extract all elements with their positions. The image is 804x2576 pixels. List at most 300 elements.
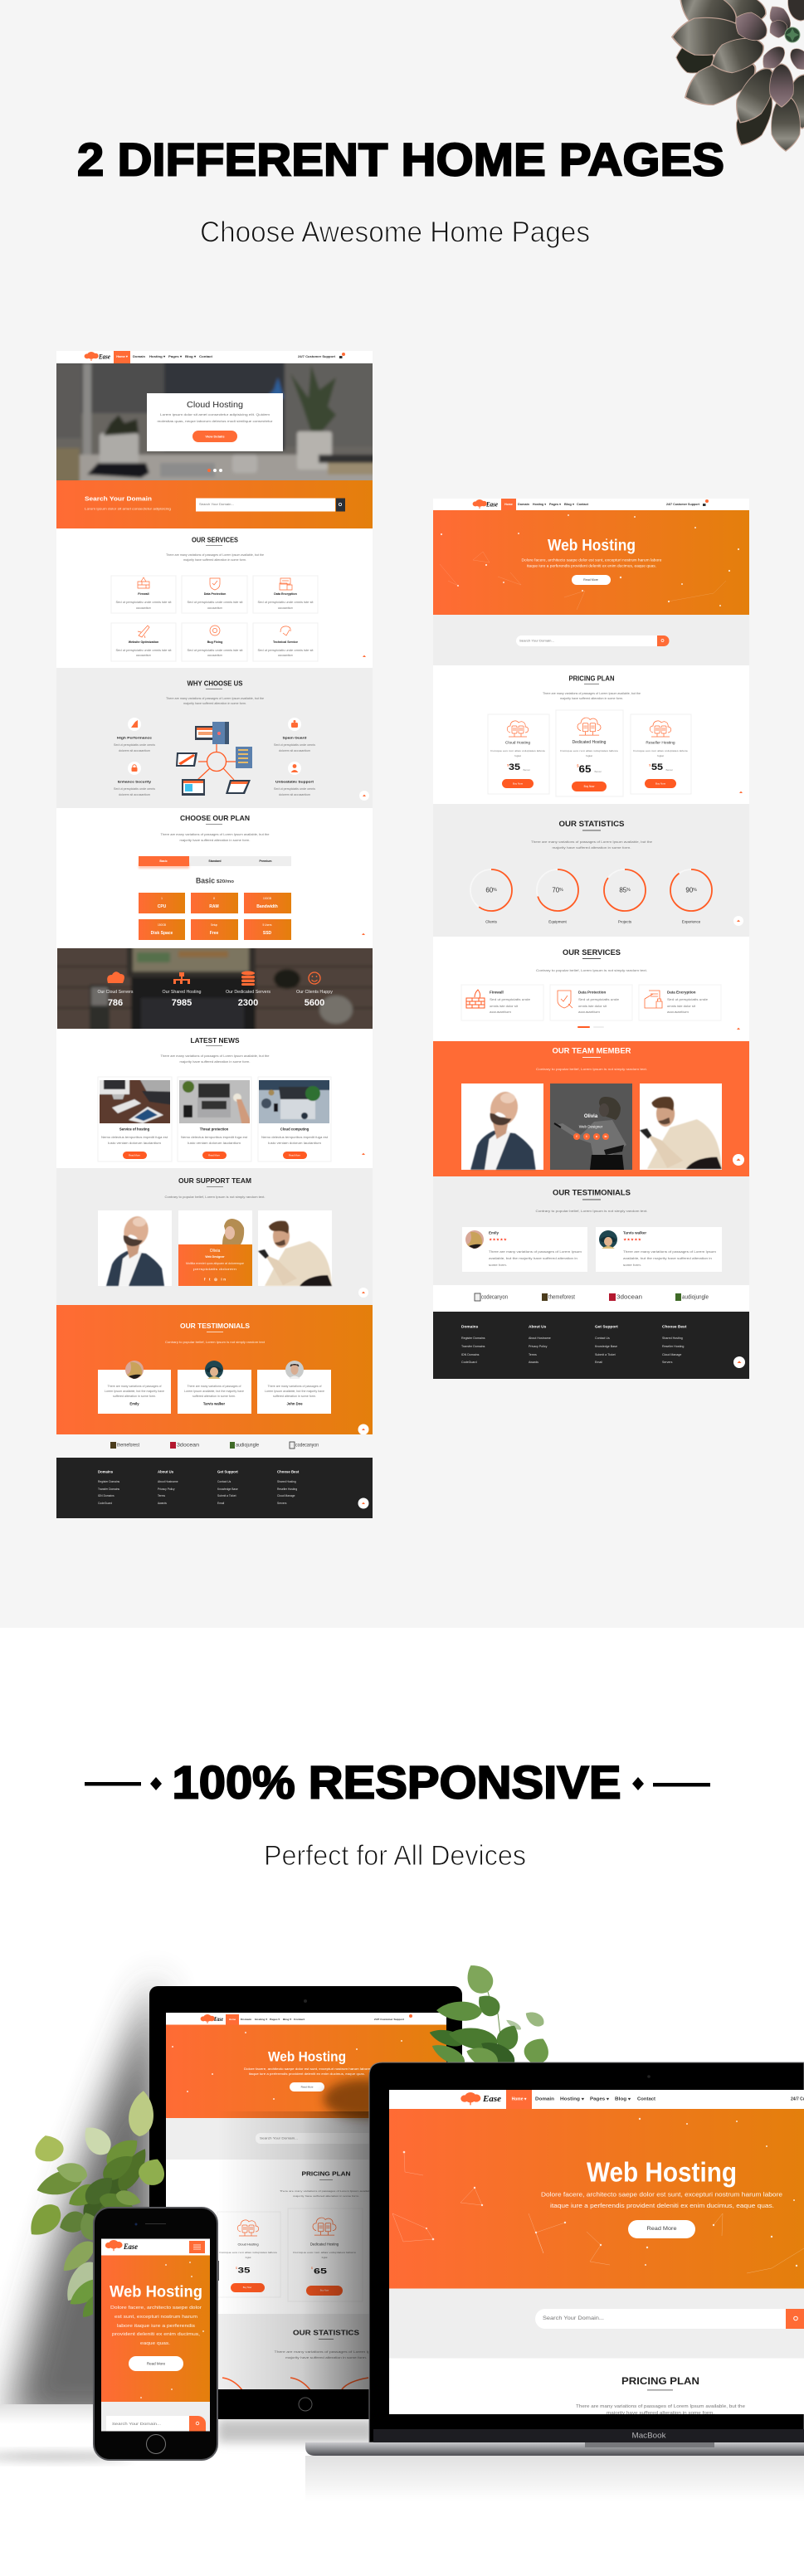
section: our testimonials: John Doe	[286, 1402, 303, 1405]
footer 2: Choose Best	[662, 1324, 687, 1329]
tablet screen: 35	[237, 2267, 251, 2275]
phone screen: Web Hosting	[110, 2283, 202, 2301]
macbook label: MacBook	[632, 2431, 666, 2441]
footer 1: Awards	[158, 1502, 167, 1505]
team card: man with phone	[258, 1210, 332, 1286]
section: our testimonials 2: Emily	[489, 1231, 499, 1234]
tablet screen: Buy Now	[243, 2286, 251, 2289]
tablet screen: There are many variations of passages of Lorem Ipsum available	[280, 2189, 373, 2193]
section: why choose us: dolorem sit accusantium	[119, 793, 150, 796]
section: our services: Technical Service	[273, 640, 298, 644]
device: laptop	[305, 2062, 804, 2456]
section: our testimonials 2: some form.	[623, 1264, 641, 1267]
laptop screen: Home ▾	[512, 2097, 527, 2102]
section: choose our plan: Premium	[260, 859, 271, 863]
team card: olivia: f t ◎ in	[204, 1278, 226, 1281]
section: latest news: Threat protection	[200, 1127, 229, 1132]
section: our services: Sed ut perspiciatis unde omnis iste sit	[188, 601, 243, 604]
section: latest news: Iusto veniam dolorum laudantium	[188, 1142, 241, 1145]
tablet screen: Domain	[241, 2018, 251, 2021]
section: our testimonials: Tarvis walker	[203, 1402, 225, 1405]
section: pricing plan: /Server	[594, 770, 602, 773]
section: our services 2: Firewall	[490, 991, 504, 994]
section: pricing plan: Reseller Hosting	[646, 740, 675, 745]
team 2 card: bald man	[461, 1083, 543, 1170]
section: pricing plan: Buy Now	[655, 782, 666, 785]
section: pricing plan	[488, 675, 746, 797]
section: why choose us: Sed ut perspiciatis unde omnis	[114, 743, 155, 747]
team card: olivia: Olivia	[210, 1249, 220, 1254]
section: our services 2: accusantium	[578, 1010, 600, 1014]
tablet screen: Ease	[213, 2016, 223, 2023]
search domain strip: Search Your Domain...	[519, 639, 554, 642]
section: our statistics: There are many variations of passages of Lorem Ipsum available, but the	[531, 840, 652, 844]
section: why choose us: majority have suffered alteration in some form.	[183, 702, 246, 705]
laptop screen: itaque iure a perferendis provident deleniti ex enim ducimus, eaque quas.	[550, 2202, 774, 2209]
progress ring: experience 90%	[670, 869, 712, 924]
section: latest news: Iusto veniam dolorum laudantium	[108, 1142, 161, 1145]
title: 2 different home pages: 2 DIFFERENT HOME PAGES	[77, 133, 724, 186]
section: choose our plan: majority have suffered alteration in some form.	[179, 839, 251, 842]
section: our testimonials 2: ★★★★★	[623, 1238, 642, 1241]
section: pricing plan: Cumque eos non alias voluptates labore	[490, 749, 545, 752]
search your domain band: Search Your Domain	[85, 494, 152, 503]
navigation bar 2	[473, 499, 709, 510]
section: pricing plan: $	[507, 763, 509, 767]
section: why choose us: dolorem sit accusantium	[279, 793, 310, 796]
navigation bar 2: Home	[504, 503, 513, 506]
footer 2: Reseller Hosting	[662, 1345, 684, 1348]
section: why choose us: Enhance Security	[118, 780, 152, 783]
stats band over desk photo	[57, 948, 373, 1029]
section: pricing plan: 55	[651, 762, 663, 772]
section: latest news: Iusto veniam dolorum laudantium	[268, 1142, 321, 1145]
tablet screen: There are many variations of passages of Lorem Ipsum	[274, 2350, 378, 2354]
section: our services 2: Data Encryption	[667, 991, 696, 994]
laptop screen: Ease	[482, 2094, 501, 2104]
hero: web hosting gradient with particles: Web Hosting	[548, 538, 636, 554]
progress ring: projects 85%: 85%	[619, 886, 631, 894]
hero: web hosting gradient with particles: itaque iure a perferendis provident deleniti ex enim ducimus, eaque quas.	[527, 564, 656, 567]
section: why choose us: dolorem sit accusantium	[119, 749, 150, 752]
footer 2: Cloud Manage	[662, 1353, 681, 1356]
section: latest news: Read More	[289, 1153, 300, 1157]
footer 1: IDN Domains	[98, 1494, 115, 1497]
section: our services 2: omnis iste dolor sit	[667, 1005, 695, 1008]
team 2 card: olivia dark overlay: t	[586, 1135, 587, 1138]
footer 2: Shared Hosting	[662, 1337, 683, 1340]
team 2 card: olivia dark overlay: Web Designer	[579, 1125, 603, 1128]
progress ring: experience 90%: Experience	[682, 919, 701, 924]
section: latest news: There are many variations of passages of Lorem Ipsum available, but the	[161, 1054, 270, 1058]
footer 1: Cloud Manage	[277, 1494, 295, 1497]
progress ring: projects 85%	[604, 869, 646, 924]
navigation bar 1: Home ▾	[116, 355, 129, 358]
footer 2: Privacy Policy	[529, 1345, 548, 1348]
partner logos row 2: themeforest	[548, 1294, 575, 1301]
stat: clients happy: Our Clients Happy	[296, 990, 334, 995]
partner logos row 2	[475, 1293, 709, 1301]
stat: shared hosting: Our Shared Hosting	[163, 990, 202, 995]
section: why choose us: Sed ut perspiciatis unde omnis	[274, 787, 315, 791]
footer 1: Contact Us	[217, 1480, 231, 1483]
hero card	[147, 393, 283, 451]
section: our services: accusantium	[207, 654, 222, 657]
footer 1: Email	[217, 1502, 225, 1505]
tablet screen: Cumque eos non alias voluptates labore	[293, 2251, 357, 2254]
partner logos row: themeforest	[117, 1442, 139, 1449]
section: our services: accusantium	[278, 654, 293, 657]
partner logos row: codecanyon	[295, 1442, 319, 1449]
section: our testimonials 2: There are many variations of passages of Lorem Ipsum	[489, 1250, 582, 1254]
stat: clients happy	[296, 972, 334, 1008]
icon: cloud servers x3	[507, 718, 671, 737]
section: pricing plan: 65	[579, 763, 592, 775]
navigation bar 1: Pages ▾	[168, 355, 183, 358]
section: pricing plan: 35	[509, 762, 520, 772]
tablet screen: majority have suffered alteration in some form.	[293, 2194, 359, 2198]
hero: web hosting gradient with particles: Read More	[583, 578, 598, 582]
icon: website optimization	[138, 626, 149, 638]
section: our testimonials: Lorem Ipsum available, but the majority have	[105, 1390, 164, 1393]
laptop screen: Contact	[637, 2097, 655, 2102]
network diagram illustration	[176, 722, 252, 796]
section: our testimonials: suffered alteration in some form.	[192, 1395, 236, 1398]
section: our testimonials 2: some form.	[489, 1264, 507, 1267]
section: choose our plan: SSD	[263, 931, 272, 936]
section: our testimonials: Lorem Ipsum available, but the majority have	[184, 1390, 244, 1393]
footer 1	[56, 1458, 373, 1518]
team card: olivia: Mollitia eveniet quos aliquam at doloremque	[186, 1262, 244, 1265]
device: phone	[94, 2208, 219, 2460]
section: our testimonials 2	[433, 1176, 749, 1285]
section: pricing plan: /Server	[665, 768, 673, 772]
section: our services 2: Contrary to popular belief, Lorem Ipsum is not simply random text.	[536, 969, 647, 972]
footer 2: Awards	[529, 1361, 538, 1364]
team card: olivia	[178, 1210, 252, 1286]
section: choose our plan: 1	[161, 897, 163, 900]
section: our services: Sed ut perspiciatis unde omnis iste sit	[257, 649, 314, 652]
partner logos row 2: audiojungle	[682, 1294, 709, 1301]
phone screen: Ease	[123, 2242, 138, 2251]
footer 2: Knowledge Base	[595, 1345, 617, 1348]
stat: dedicated servers: 2300	[238, 998, 258, 1008]
search your domain band: Search Your Domain...	[199, 503, 234, 506]
tablet screen: Search Your Domain...	[260, 2137, 298, 2140]
background shadows behind the devices	[0, 1975, 804, 2501]
footer 2: Terms	[529, 1353, 537, 1356]
search your domain band	[56, 480, 373, 528]
section: our testimonials 2: available, but the majority have suffered alteration in	[623, 1257, 712, 1260]
section: latest news: Nemo delectus temporibus impedit fuga est	[181, 1136, 247, 1139]
section: our services 2: accusantium	[490, 1010, 511, 1014]
section: our services: accusantium	[136, 606, 151, 610]
section: our team member: Contrary to popular belief, Lorem Ipsum is not simply random text.	[536, 1068, 647, 1071]
section: choose our plan: Basic	[159, 859, 168, 863]
section: choose our plan: 150GB	[158, 923, 166, 927]
tablet screen: Buy Now	[320, 2288, 329, 2291]
section: our statistics	[433, 804, 749, 937]
icon: data protection	[210, 578, 220, 590]
section: pricing plan: Cumque eos non alias voluptates labore	[560, 749, 618, 752]
section: our services: Website Optimization	[129, 640, 158, 644]
laptop screen: majority have suffered alteration in some form.	[607, 2411, 715, 2416]
navigation bar 1: Ease	[98, 353, 110, 360]
section: why choose us: WHY CHOOSE US	[188, 680, 243, 687]
section: our testimonials: suffered alteration in some form.	[273, 1395, 316, 1398]
footer 2: Domains	[461, 1324, 479, 1329]
laptop base	[305, 2442, 804, 2456]
tablet screen: fugiat	[246, 2256, 251, 2259]
section: our services: Data Encryption	[274, 592, 297, 596]
navigation bar 1: Contact	[199, 355, 213, 358]
progress ring: experience 90%: 90%	[685, 886, 697, 894]
service icon: data encryption	[645, 991, 662, 1008]
partner logos row: audiojungle	[236, 1442, 259, 1449]
footer 2: Submit a Ticket	[595, 1353, 616, 1356]
section: our services: Sed ut perspiciatis unde omnis iste sit	[257, 601, 314, 604]
phone screen: Search Your Domain...	[112, 2422, 161, 2426]
news photo 1	[100, 1080, 170, 1123]
footer 1: Servers	[277, 1502, 287, 1505]
footer 1: Register Domains	[98, 1480, 120, 1483]
section: our services: majority have suffered alteration in some form.	[183, 558, 246, 562]
section: our services: Sed ut perspiciatis unde omnis iste sit	[116, 601, 172, 604]
tablet screen: Dedicated Hosting	[310, 2242, 339, 2247]
footer 2: Contact Us	[595, 1337, 610, 1340]
section: our services 2: omnis iste dolor sit	[490, 1005, 518, 1008]
tablet screen: Cloud Hosting	[237, 2242, 259, 2247]
section: pricing plan: Cumque eos non alias voluptates labore	[633, 749, 688, 752]
phone screen: eaque quas.	[140, 2341, 171, 2346]
footer 2: CodeGuard	[461, 1361, 477, 1364]
section: our services: Data Protection	[204, 592, 226, 596]
footer 1: About Hostname	[158, 1480, 178, 1483]
section: pricing plan: $	[649, 763, 651, 767]
section: why choose us: Sed ut perspiciatis unde omnis	[114, 787, 155, 791]
laptop screen: PRICING PLAN	[621, 2377, 699, 2387]
team 2 card: olivia dark overlay: in	[604, 1135, 607, 1138]
stat: cloud servers: Our Cloud Servers	[98, 990, 134, 995]
team 2 card: man with phone	[640, 1083, 722, 1170]
section: pricing plan: fugiat	[514, 754, 521, 757]
footer 1: Terms	[158, 1494, 165, 1497]
section: our services 2: Sed ut perspiciatis unde	[667, 998, 708, 1001]
footer 1: Shared Hosting	[277, 1480, 296, 1483]
section: latest news: LATEST NEWS	[191, 1036, 240, 1045]
footer 2: Get Support	[595, 1324, 618, 1329]
stat: clients happy: 5600	[305, 998, 324, 1008]
section: our services: accusantium	[207, 606, 222, 610]
footer 2: Register Domains	[461, 1337, 485, 1340]
tablet screen: $	[236, 2267, 237, 2270]
section: latest news: Nemo delectus temporibus impedit fuga est	[261, 1136, 328, 1139]
section: our testimonials: suffered alteration in some form.	[113, 1395, 156, 1398]
section: our services: accusantium	[278, 606, 293, 610]
phone screen: Dolore facere, architecto saepe dolor	[110, 2306, 202, 2311]
section: pricing plan: Buy Now	[584, 785, 595, 788]
tablet screen: Contact	[294, 2018, 305, 2021]
section: latest news: Service of hosting	[119, 1127, 150, 1132]
section: our statistics: majority have suffered alteration in some form.	[553, 846, 631, 850]
section: pricing plan: There are many variations of passages of Lorem Ipsum available, but the	[543, 692, 641, 695]
tablet screen: OUR STATISTICS	[293, 2330, 360, 2336]
navigation bar 2: Ease	[485, 501, 498, 508]
section: choose our plan: Bandwidth	[256, 904, 278, 909]
section: our support team: Contrary to popular belief, Lorem Ipsum is not simply random text.	[164, 1195, 266, 1199]
section: pricing plan: Cloud Hosting	[505, 740, 530, 745]
section: latest news: Nemo delectus temporibus impedit fuga est	[101, 1136, 168, 1139]
section: our testimonials: Lorem Ipsum available, but the majority have	[265, 1390, 324, 1393]
section: choose our plan: Setup	[211, 923, 217, 927]
footer 2: About Us	[529, 1324, 547, 1329]
section: our services 2: Sed ut perspiciatis unde	[490, 998, 530, 1001]
footer 1: Get Support	[217, 1470, 238, 1473]
tablet screen: Read More	[301, 2086, 314, 2089]
navigation bar 2: Hosting ▾	[533, 503, 547, 506]
navigation bar 2: Pages ▾	[549, 503, 562, 506]
section: our testimonials: There are many variations of passages of	[188, 1385, 241, 1388]
hero photo with cloud hosting box	[56, 363, 373, 480]
stat: dedicated servers	[226, 971, 271, 1008]
search your domain band: Lorem ipsum dolor sit amet consectetur adipisicing	[85, 506, 171, 511]
navigation bar 1: Blog ▾	[185, 355, 197, 358]
stat: shared hosting	[163, 972, 202, 1008]
footer 1: Reseller Hosting	[277, 1488, 297, 1491]
team card: olivia: Web Designer	[205, 1255, 225, 1259]
section: our services 2: OUR SERVICES	[563, 948, 621, 957]
laptop screen: Dolore facere, architecto saepe dolor est sunt, excepturi nostrum harum labore	[541, 2190, 782, 2199]
hero card: View Details	[205, 435, 225, 438]
section: choose our plan: 8	[213, 897, 215, 900]
tablet screen: Hosting ▾	[255, 2018, 268, 2021]
tablet screen: 24/7 Customer Support	[374, 2018, 404, 2021]
section: our testimonials: There are many variations of passages of	[108, 1385, 162, 1388]
progress ring: clients 60%	[470, 869, 512, 924]
team 2 card: olivia dark overlay: Olivia	[584, 1114, 598, 1119]
tablet screen: majority have suffered alteration in some form.	[285, 2356, 367, 2359]
section: choose our plan: Disk Space	[151, 931, 173, 936]
tablet screen: $	[311, 2267, 313, 2270]
section: pricing plan: majority have suffered alteration in some form.	[560, 697, 623, 700]
section: our services 2: accusantium	[667, 1010, 689, 1014]
navigation bar 2: Contact	[577, 503, 589, 506]
tablet screen: 65	[314, 2267, 328, 2277]
section: our testimonials: Emily	[129, 1402, 139, 1405]
section: why choose us: High Performance	[117, 735, 153, 740]
section: our services: Sed ut perspiciatis unde omnis iste sit	[116, 649, 172, 652]
section: choose our plan: $20/mo	[217, 879, 234, 884]
partner logos row: 3docean	[177, 1442, 199, 1449]
section: our testimonials: Contrary to popular belief, Lorem Ipsum is not simply random text	[165, 1341, 265, 1344]
progress ring: equipment 70%: Equipment	[548, 919, 568, 924]
section: our testimonials 2: Tarvis walker	[623, 1231, 646, 1234]
tablet screen: Cumque eos non alias voluptates labore	[219, 2251, 278, 2254]
section: our services: Firewall	[138, 592, 149, 596]
laptop screen: Pages ▾	[590, 2097, 610, 2102]
section: our services 2	[461, 948, 743, 1034]
tablet screen: itaque iure a perferendis provident deleniti ex enim ducimus, eaque quas.	[249, 2072, 365, 2076]
laptop screen	[389, 2090, 804, 2416]
section: our services 2: Sed ut perspiciatis unde	[578, 998, 619, 1001]
tablet screen: Web Hosting	[268, 2049, 346, 2064]
section: our team member	[433, 1041, 749, 1176]
footer 1: Submit a Ticket	[217, 1494, 236, 1497]
tablet screen: Blog ▾	[283, 2018, 292, 2021]
stat: cloud servers: 786	[108, 998, 123, 1008]
section: choose our plan: Standard	[208, 859, 222, 863]
section: choose our plan	[139, 814, 368, 940]
news photo 2	[179, 1080, 250, 1123]
section: why choose us: dolorem sit accusantium	[279, 749, 310, 752]
subtitle: perfect for all devices: Perfect for All Devices	[264, 1840, 526, 1872]
tablet screen	[166, 2013, 446, 2390]
team card: bald man	[98, 1210, 172, 1286]
section: our testimonials 2: There are many variations of passages of Lorem Ipsum	[623, 1250, 716, 1254]
footer 2: About Hostname	[529, 1337, 551, 1340]
section: choose our plan: RAM	[209, 904, 219, 909]
tablet screen: Home	[229, 2018, 236, 2021]
section: choose our plan: Basic	[196, 876, 215, 886]
section: our services: accusantium	[136, 654, 151, 657]
hero card: Lorem ipsum dolor sit amet consectetur adipisicing elit. Quidem	[160, 413, 270, 416]
partner logos row 2: codecanyon	[481, 1294, 508, 1301]
progress ring: equipment 70%: 70%	[552, 886, 563, 894]
footer 2	[433, 1312, 749, 1379]
navigation bar 1: 24/7 Customer Support	[298, 355, 336, 358]
laptop screen: Web Hosting	[587, 2157, 737, 2187]
section: our services: OUR SERVICES	[192, 536, 239, 544]
laptop screen: Hosting ▾	[560, 2097, 585, 2102]
section: choose our plan: CPU	[158, 904, 167, 909]
section: our statistics: OUR STATISTICS	[559, 820, 624, 828]
subtitle: choose awesome home pages: Choose Awesome Home Pages	[200, 216, 590, 249]
footer 1: Privacy Policy	[158, 1488, 175, 1491]
navigation bar 2: Domain	[518, 503, 529, 506]
tablet screen: fugiat	[322, 2256, 328, 2259]
tablet screen: PRICING PLAN	[302, 2172, 350, 2177]
section: pricing plan: Buy Now	[513, 782, 524, 785]
heading: 100% responsive with ornaments	[85, 1755, 710, 1809]
team 2 card: olivia dark overlay	[550, 1083, 632, 1170]
plant: right behind laptop	[427, 1959, 554, 2071]
footer 2: Transfer Domains	[461, 1345, 485, 1348]
section: why choose us: There are many variations of passages of Lorem Ipsum available, but the	[166, 697, 264, 700]
stat: cloud servers	[98, 971, 134, 1008]
section: our team member: OUR TEAM MEMBER	[553, 1047, 631, 1055]
team card: olivia: perspiciatis dolorem	[193, 1268, 236, 1271]
hero: web hosting gradient with particles: Dolore facere, architecto saepe dolor est sunt, excepturi nostrum harum labore	[521, 558, 662, 562]
section: our testimonials: OUR TESTIMONIALS	[180, 1322, 250, 1330]
section: choose our plan: 100GB	[263, 897, 271, 900]
section: our testimonials	[56, 1305, 373, 1435]
section: pricing plan: Dedicated Hosting	[573, 740, 607, 745]
section: our services 2: Data Protection	[578, 991, 607, 994]
icon: data encryption	[280, 578, 292, 590]
team 2 card: olivia dark overlay: f	[576, 1135, 577, 1138]
section: our testimonials: There are many variations of passages of	[267, 1385, 322, 1388]
section: choose our plan: Free	[210, 931, 218, 936]
progress ring: clients 60%: 60%	[485, 886, 497, 894]
decorative succulent	[672, 0, 804, 151]
section: why choose us: Spam Guard	[282, 735, 307, 740]
section: our testimonials 2: Contrary to popular belief, Lorem Ipsum is not simply random text.	[536, 1210, 647, 1213]
section: pricing plan: $	[577, 763, 579, 768]
device: tablet	[149, 1986, 462, 2419]
navigation bar 1: Domain	[133, 355, 146, 358]
team 2 card: olivia dark overlay: o	[596, 1135, 597, 1138]
section: our testimonials 2: available, but the majority have suffered alteration in	[489, 1257, 577, 1260]
